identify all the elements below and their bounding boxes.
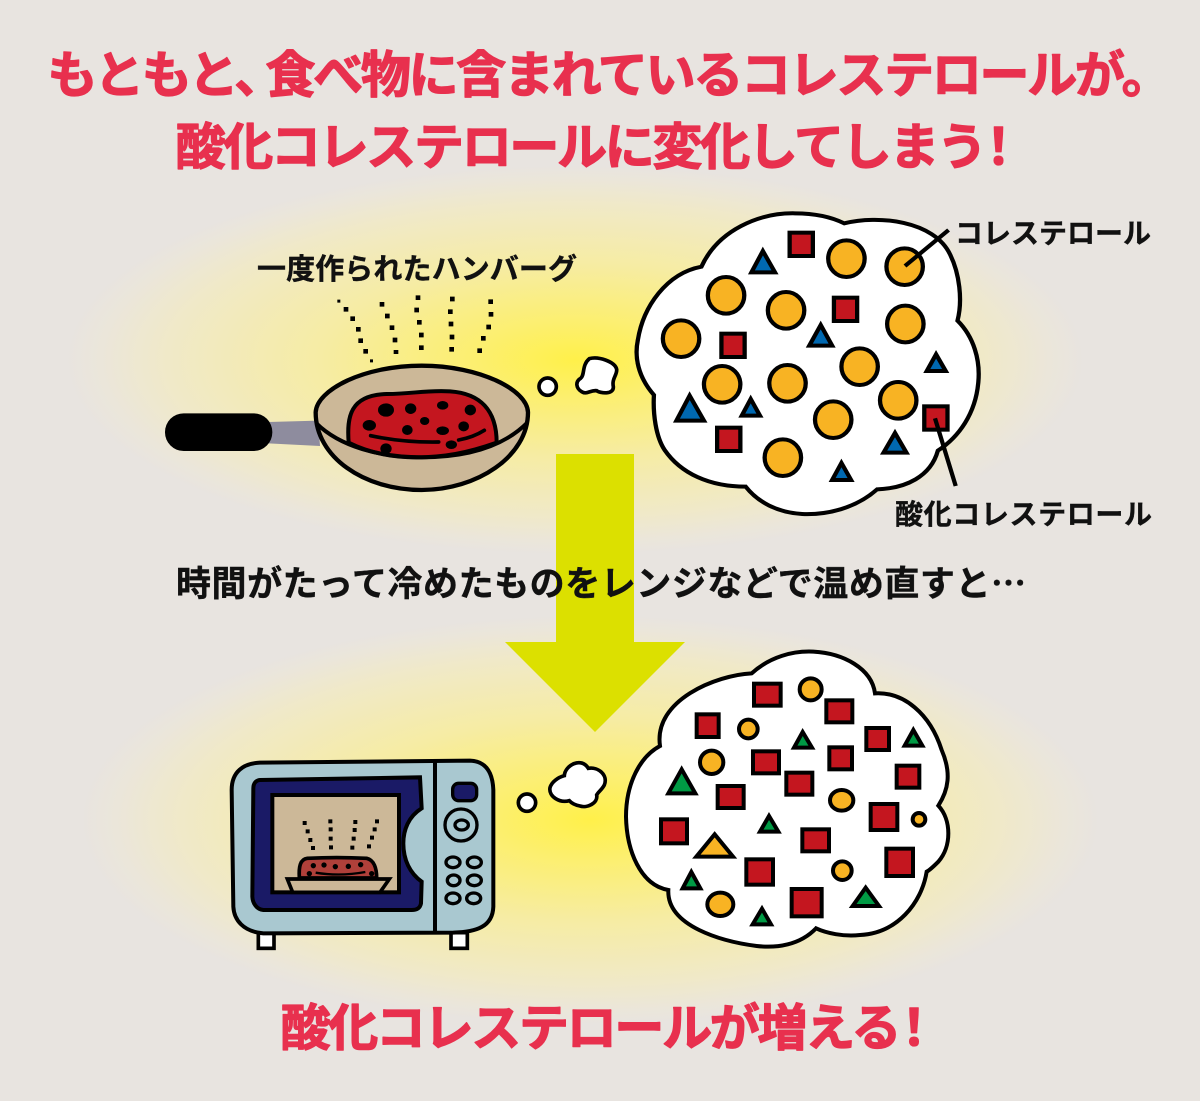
- orange triangle: [696, 834, 733, 857]
- divider: [429, 762, 441, 933]
- pan inner rim: [316, 423, 527, 457]
- blue triangles: [676, 251, 946, 480]
- steam: [303, 819, 379, 850]
- hamburger patty: [348, 391, 497, 457]
- pan body: [316, 366, 528, 490]
- oxidized squares: [661, 684, 919, 916]
- steam dots: [337, 295, 493, 362]
- cholesterol circles: [700, 678, 925, 916]
- cholesterol circles: [663, 240, 924, 476]
- molecule cloud: after: [626, 652, 948, 947]
- microwave body: [232, 761, 493, 933]
- food: [299, 858, 377, 878]
- caption: reheating: 時間がたって冷めたものをレンジなどで温め直すと…: [176, 556, 1026, 607]
- cloud outline: [626, 652, 948, 947]
- cloud outline: [637, 213, 979, 514]
- oxidized squares: [717, 233, 947, 451]
- molecule cloud: before: [637, 213, 979, 514]
- thought bubble cloud: [577, 358, 617, 393]
- illustration: microwave: [232, 761, 605, 948]
- thought bubble cloud: [550, 763, 605, 807]
- arrow: down: [505, 454, 685, 732]
- label: cholesterol: コレステロール: [955, 218, 1151, 249]
- title: ！: [974, 108, 1021, 180]
- conclusion heading: ！: [889, 988, 937, 1060]
- microwave feet: [258, 933, 467, 948]
- oven interior: [272, 795, 399, 892]
- title: 酸化コレステロールに変化してしまう: [176, 108, 985, 180]
- label: oxidized cholesterol: 酸化コレステロール: [895, 499, 1152, 530]
- conclusion heading: 酸化コレステロールが増える: [280, 988, 899, 1060]
- pan handle: [165, 413, 320, 451]
- green triangles: [668, 730, 922, 924]
- thought bubble small: [539, 378, 556, 395]
- leader lines: [905, 230, 956, 486]
- plate: [287, 879, 389, 892]
- label: cooked hamburger: 一度作られたハンバーグ: [257, 253, 577, 286]
- title: 食べ物に含まれているコレステロールが。: [266, 36, 1169, 108]
- control panel: [445, 783, 481, 904]
- title: [48, 36, 1169, 180]
- illustration: frying pan with hamburger: [165, 295, 617, 490]
- title: もともと、: [48, 36, 282, 108]
- door window: [252, 777, 422, 910]
- thought bubble small: [518, 794, 536, 811]
